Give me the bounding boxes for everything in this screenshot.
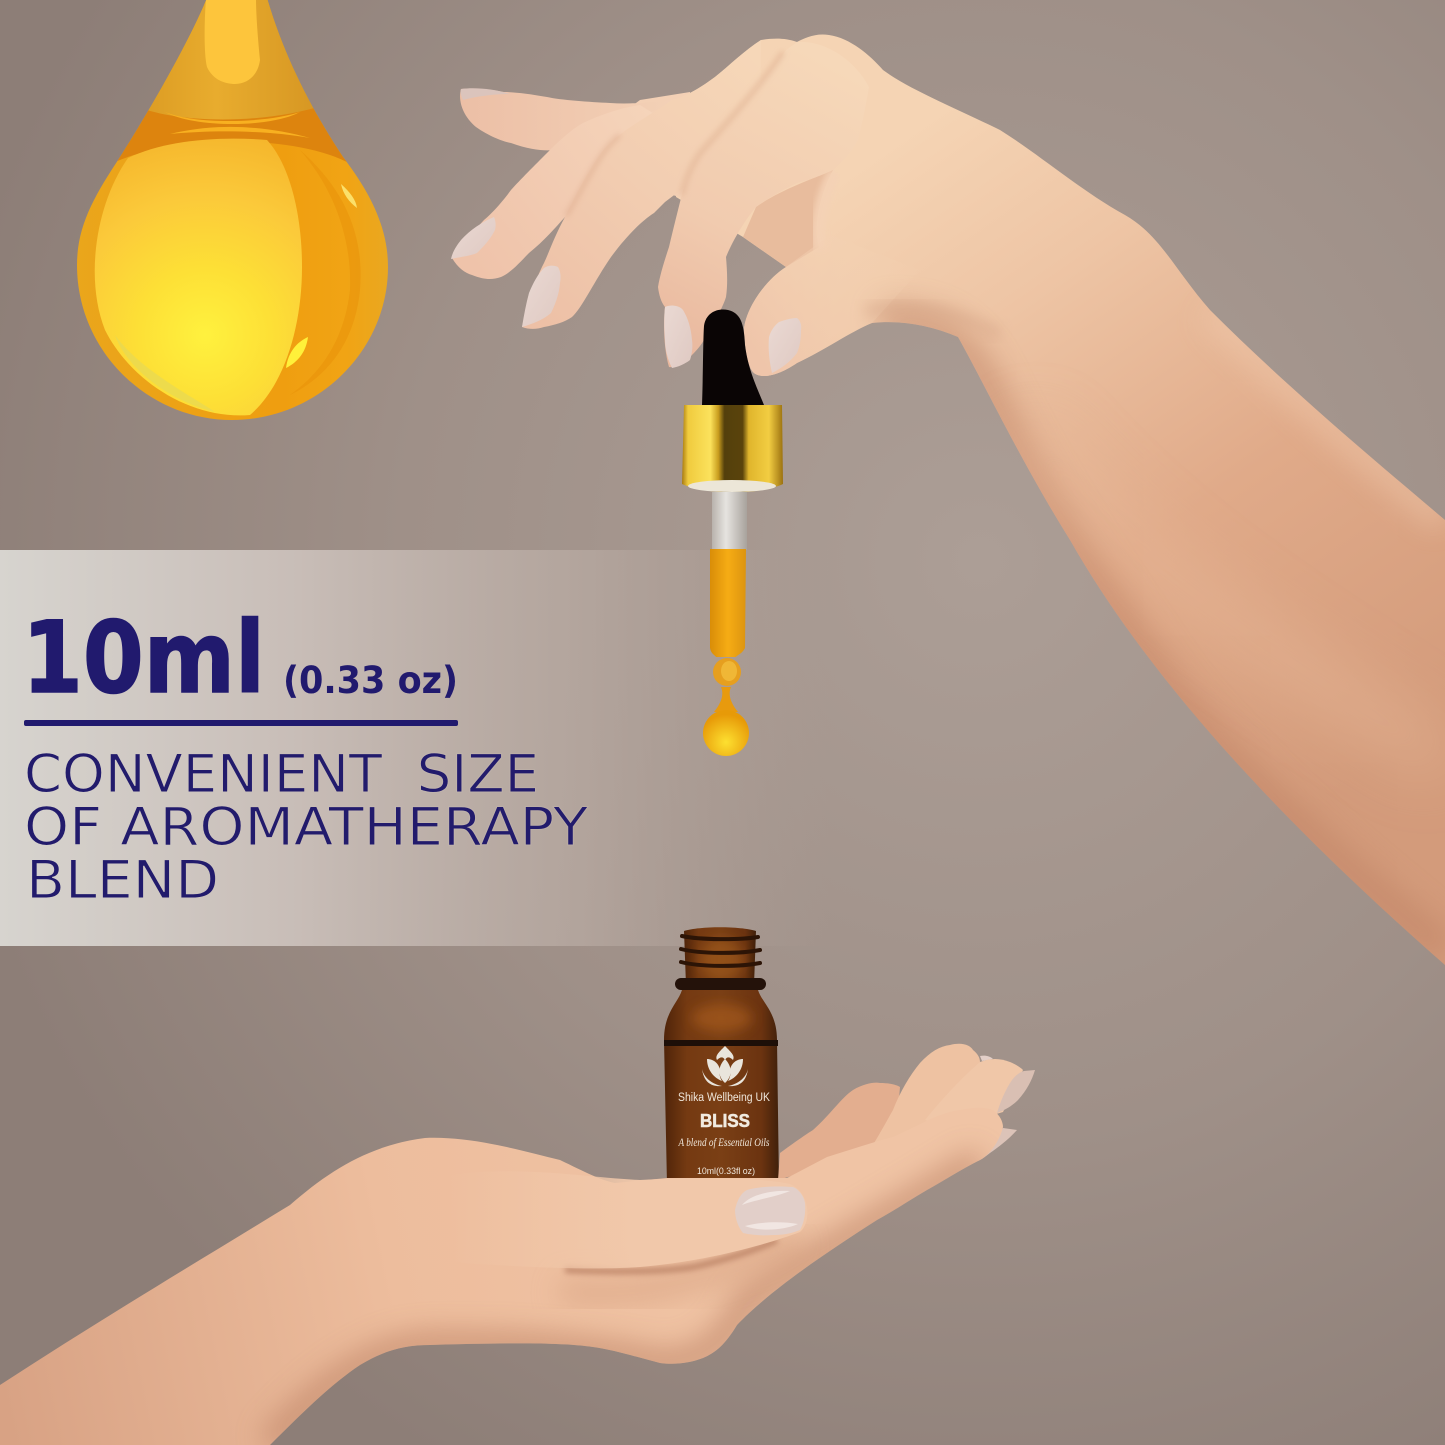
pipette bulb <box>713 658 741 686</box>
nail: middle finger <box>997 1070 1035 1113</box>
nail: thumb <box>735 1186 805 1235</box>
thumb mount crease <box>818 172 835 250</box>
palm shading <box>270 1160 980 1445</box>
glass tube <box>712 492 747 550</box>
lens pale bottom <box>115 335 215 412</box>
icon: oil drop <box>70 0 395 423</box>
heading: 10ml: 10ml <box>22 601 265 716</box>
collar rim <box>688 480 776 492</box>
nail: second finger <box>451 217 496 259</box>
highlight: lower <box>286 337 308 368</box>
highlight: upper <box>341 184 357 208</box>
rubber bulb <box>702 310 764 405</box>
drop neck <box>124 0 337 150</box>
bottle neck <box>684 927 756 985</box>
upper hand holding dropper <box>451 35 1445 965</box>
hand and forearm <box>672 35 1445 965</box>
finger: middle <box>925 1059 1023 1125</box>
finger: third <box>522 40 761 329</box>
finger: back <box>460 89 700 150</box>
dropper <box>682 310 783 756</box>
label: tagline: A blend of Essential Oils <box>678 1135 770 1149</box>
forearm shading <box>880 310 1445 950</box>
amber bottle <box>664 927 779 1185</box>
oil column <box>710 549 746 657</box>
label: brand: Shika Wellbeing UK <box>678 1092 770 1104</box>
bottle body <box>664 990 779 1185</box>
text block: description <box>24 744 589 911</box>
text block: description: CONVENIENT SIZE <box>24 744 539 805</box>
finger: little <box>778 1083 900 1180</box>
palm and forearm <box>0 1108 1003 1445</box>
logo: lotus <box>702 1046 748 1086</box>
meniscus highlight <box>165 112 310 138</box>
glass highlight <box>692 1004 752 1032</box>
nail highlights <box>742 1191 798 1230</box>
thumb crease <box>565 1240 777 1271</box>
nail: fourth finger <box>664 306 692 368</box>
text block: description: OF AROMATHERAPY <box>24 797 589 858</box>
falling drop <box>703 710 749 756</box>
finger: second <box>452 105 680 279</box>
finger: ring <box>870 1044 980 1150</box>
gold collar <box>682 405 783 492</box>
nail: ring finger <box>980 1056 993 1061</box>
finger crease: second and third <box>566 135 620 216</box>
falling drop neck <box>714 687 738 712</box>
inner streak <box>205 0 260 84</box>
neck meniscus <box>118 108 347 162</box>
divider rule <box>24 720 458 726</box>
label band <box>664 1040 778 1046</box>
bottle collar <box>675 978 766 990</box>
knuckle filler <box>600 92 690 200</box>
neck threads <box>681 936 760 966</box>
lower hand holding bottle <box>0 1044 1035 1445</box>
drop body <box>70 0 395 423</box>
thumb tint <box>744 235 920 376</box>
nail: index finger <box>978 1128 1017 1161</box>
label: product name: BLISS <box>700 1111 750 1131</box>
wrinkle shadow <box>865 307 1000 335</box>
neck glow <box>700 938 744 982</box>
nail: thumb <box>769 318 801 373</box>
text block: description: BLEND <box>26 850 219 911</box>
nail: back finger <box>461 88 510 100</box>
heading: ounces: (0.33 oz) <box>283 659 458 702</box>
bulb lens <box>95 139 302 415</box>
nail: third finger <box>522 266 561 327</box>
finger: fourth <box>658 42 869 367</box>
thumb <box>450 1171 807 1268</box>
orange rim <box>300 156 360 389</box>
pipette bulb highlight <box>721 661 737 681</box>
label: volume: 10ml(0.33fl oz) <box>697 1166 755 1177</box>
finger crease shadow <box>682 52 783 195</box>
panel: translucent banner <box>0 550 830 946</box>
palm shadow <box>743 170 833 267</box>
